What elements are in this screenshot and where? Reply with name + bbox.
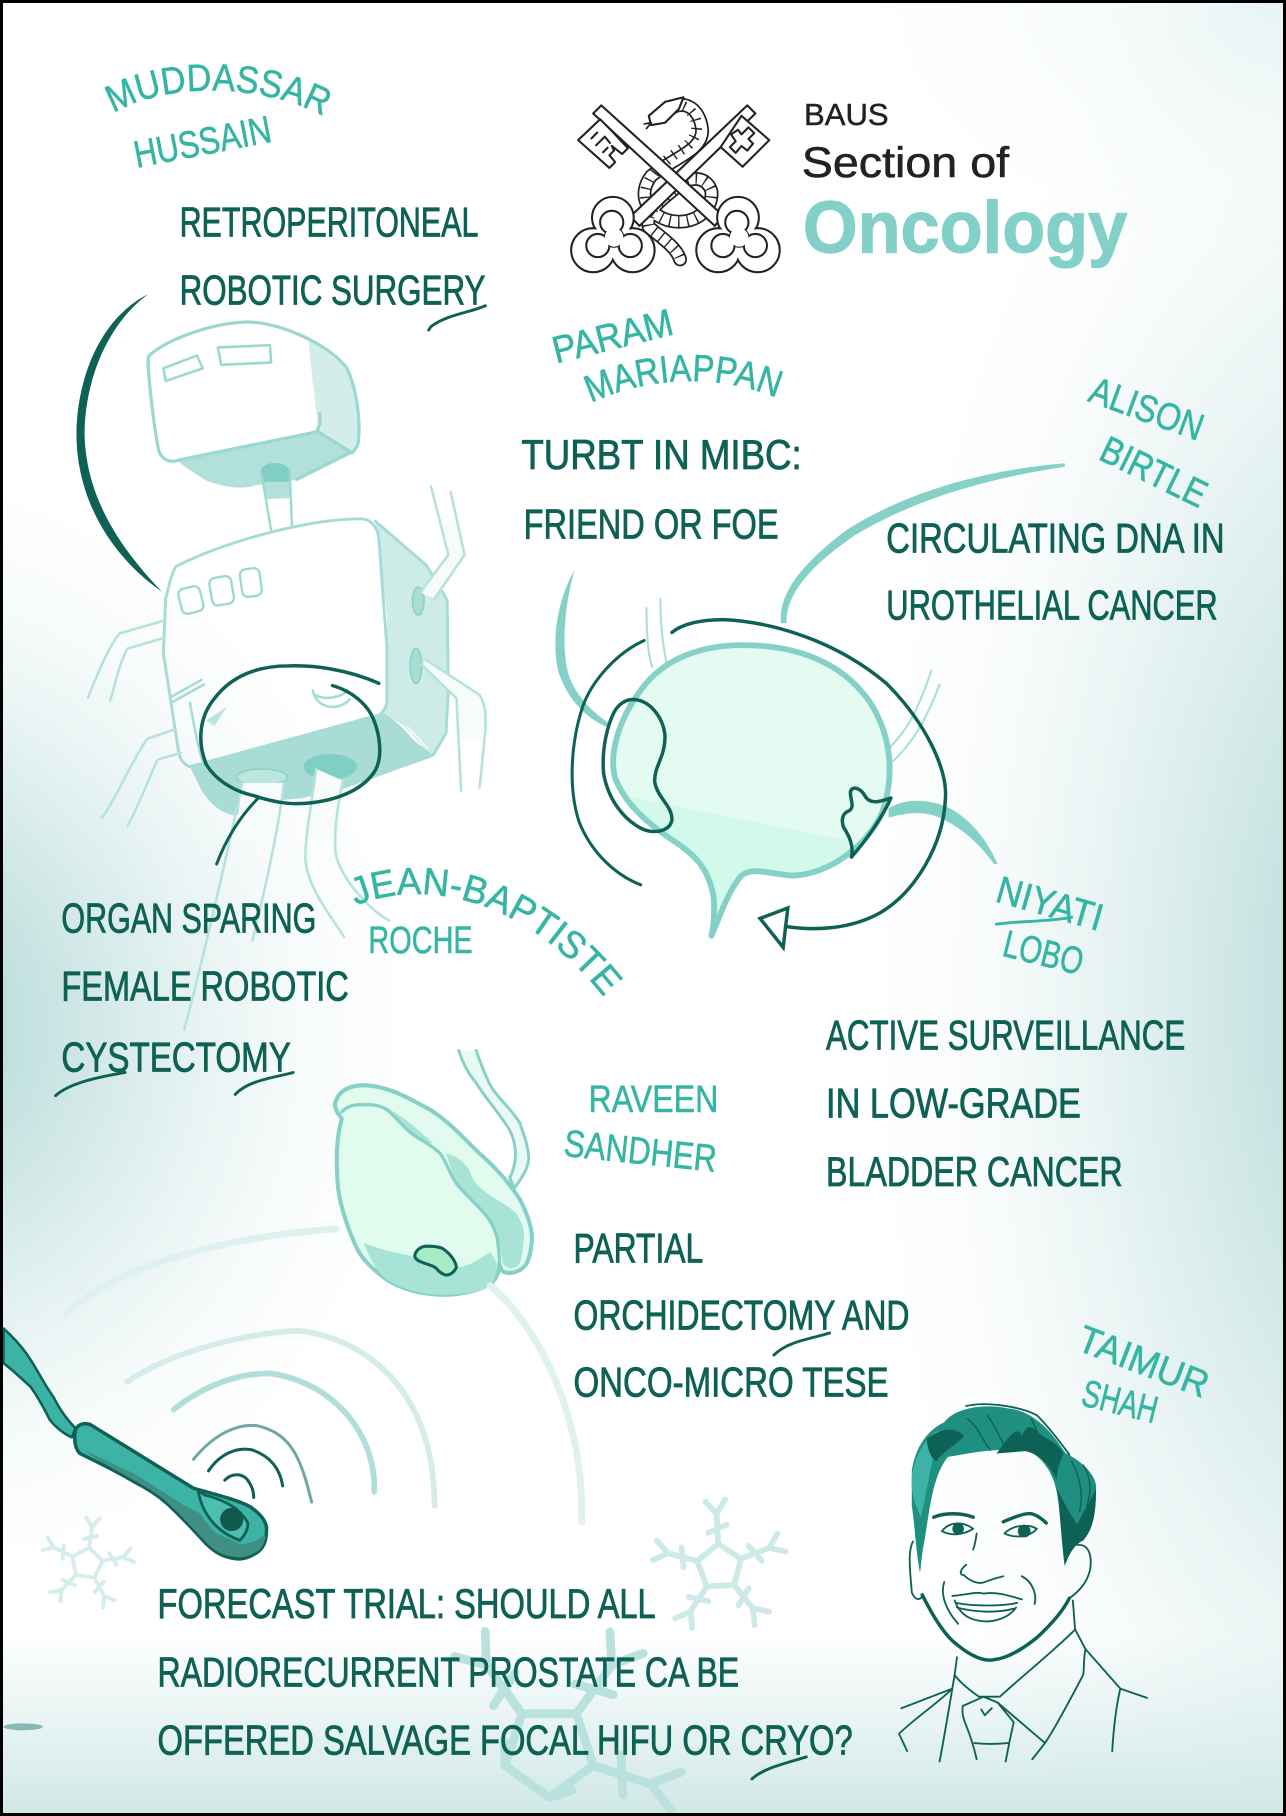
speaker name: Alison Birtle: BIRTLE [1093, 428, 1214, 516]
portrait: face lines [910, 1514, 1091, 1660]
speaker name: Taimur Shah: TAIMUR [1072, 1318, 1215, 1407]
pointer line to female cystectomy [217, 798, 258, 864]
speaker name: Alison Birtle: ALISON [1084, 369, 1209, 450]
talk title: active surveillance: BLADDER CANCER [826, 1148, 1123, 1195]
speaker name: Niyati Lobo: LOBO [999, 923, 1088, 984]
robot: neck [261, 463, 292, 530]
talk title: organ sparing cystectomy: ORGAN SPARING [61, 894, 316, 941]
speaker name: Muddassar Hussain [104, 64, 330, 177]
speaker name: Raveen Sandher [562, 1078, 719, 1181]
robot: tube lines [88, 486, 486, 1030]
testis: spermatic cord [459, 1050, 529, 1188]
talk title: circulating DNA [886, 514, 1225, 629]
logo: serpent [644, 97, 712, 259]
speaker name: Muddassar Hussain: MUDDASSAR [104, 64, 330, 116]
talk title: partial orchidectomy [573, 1224, 909, 1406]
bladder: organ shape [613, 645, 890, 936]
logo text: BAUS Section of Oncology: BAUS [804, 99, 889, 132]
bladder: left tumour outline [603, 700, 672, 831]
logo: key pointing up left [578, 105, 780, 272]
illustration: bladder [555, 463, 1065, 947]
talk title: retroperitoneal robotic surgery: ROBOTIC SURGERY [180, 267, 485, 314]
testis: main body [335, 1085, 532, 1295]
probe: shaded underside [83, 1450, 265, 1557]
portrait: hair [912, 1404, 1096, 1573]
probe: handle [75, 1424, 267, 1559]
talk title: active surveillance: IN LOW-GRADE [826, 1080, 1081, 1127]
callout: circle around lower robot [201, 666, 380, 804]
illustration: HIFU waves [66, 1229, 582, 1522]
logo: key pointing up right [571, 105, 769, 272]
icon: snowflake molecule right [649, 1496, 789, 1631]
bladder: teal lead to Niyati Lobo [889, 801, 998, 864]
robot: clamp and bracket [170, 680, 350, 764]
talk title: TURBT in MIBC [521, 431, 802, 548]
talk title: active surveillance [826, 1011, 1185, 1195]
small mark at bottom left [3, 1723, 43, 1730]
speaker name: Jean-Baptiste Roche: ROCHE [368, 919, 473, 962]
probe: cable [3, 1328, 75, 1437]
talk title: organ sparing cystectomy [56, 894, 349, 1096]
probe: transducer head [198, 1491, 248, 1540]
talk title: forecast trial: FORECAST TRIAL: SHOULD ALL [158, 1580, 656, 1627]
bladder: right papillary tumour outline [842, 788, 891, 857]
talk title: forecast trial: RADIORECURRENT PROSTATE CA BE [158, 1648, 739, 1695]
logo: BAUS crossed keys and serpent [571, 97, 780, 272]
bladder: dark arc upper right with arrow [672, 620, 946, 947]
speaker name: Raveen Sandher: RAVEEN [589, 1078, 718, 1121]
bladder: teal lead to Alison Birtle [781, 463, 1065, 623]
talk title: TURBT in MIBC: TURBT IN MIBC: [521, 431, 802, 478]
logo text: BAUS Section of Oncology [802, 99, 1128, 268]
talk title: retroperitoneal robotic surgery: RETROPERITONEAL [180, 198, 478, 245]
robot: instrument arms [88, 486, 486, 1030]
bladder: teal lead to Param Mariappan [555, 570, 611, 728]
talk title: forecast trial: OFFERED SALVAGE FOCAL HIFU OR CRYO? [158, 1717, 853, 1764]
portrait: Taimur Shah [899, 1404, 1147, 1762]
testis: epididymis shade [377, 1104, 524, 1268]
talk title: organ sparing cystectomy: CYSTECTOMY [61, 1033, 291, 1080]
speaker name: Alison Birtle [1084, 369, 1214, 516]
bladder: dark arc left [572, 640, 644, 885]
testis: lower shade [364, 1243, 497, 1295]
talk title: partial orchidectomy: ORCHIDECTOMY AND [573, 1292, 909, 1339]
arc callout to monitor [76, 294, 162, 592]
talk title: organ sparing cystectomy: FEMALE ROBOTIC [61, 963, 349, 1010]
illustration: surgical robot [76, 294, 486, 1030]
speaker name: Param Mariappan: MARIAPPAN [583, 354, 784, 402]
robot: body unit [163, 519, 448, 815]
speaker name: Niyati Lobo: NIYATI [992, 868, 1108, 940]
robot: monitor unit [148, 322, 359, 488]
talk title: retroperitoneal robotic surgery [180, 198, 485, 330]
talk title: forecast trial [158, 1580, 853, 1779]
speaker name: Param Mariappan: PARAM [548, 301, 677, 372]
logo text: BAUS Section of Oncology: Oncology [803, 187, 1128, 268]
bladder: ureters [646, 599, 940, 763]
icon: snowflake molecule left [35, 1511, 139, 1611]
illustration: HIFU probe [3, 1328, 267, 1559]
talk title: partial orchidectomy: PARTIAL [573, 1224, 703, 1271]
speaker name: Param Mariappan [548, 301, 784, 402]
robot: tube fills [235, 521, 485, 840]
speaker name: Jean-Baptiste Roche: JEAN-BAPTISTE [354, 868, 624, 996]
robot: ports [236, 587, 424, 785]
icon: snowflake molecule bottom centre [418, 1564, 736, 1816]
robot: buttons [177, 567, 263, 615]
speaker name: Niyati Lobo [992, 868, 1108, 984]
illustration: testis [335, 1050, 532, 1295]
speaker name: Taimur Shah: SHAH [1078, 1372, 1162, 1432]
speaker name: Raveen Sandher: SANDHER [562, 1122, 719, 1181]
portrait: eyes [952, 1523, 1031, 1537]
talk title: TURBT in MIBC: FRIEND OR FOE [524, 501, 779, 548]
talk title: partial orchidectomy: ONCO-MICRO TESE [573, 1359, 889, 1406]
portrait: suit and tie [899, 1601, 1147, 1762]
logo text: BAUS Section of Oncology: Section of [802, 139, 1009, 187]
testis: inner boundary [342, 1105, 499, 1264]
testis: tumour [415, 1246, 456, 1275]
speaker name: Muddassar Hussain: HUSSAIN [130, 108, 275, 177]
